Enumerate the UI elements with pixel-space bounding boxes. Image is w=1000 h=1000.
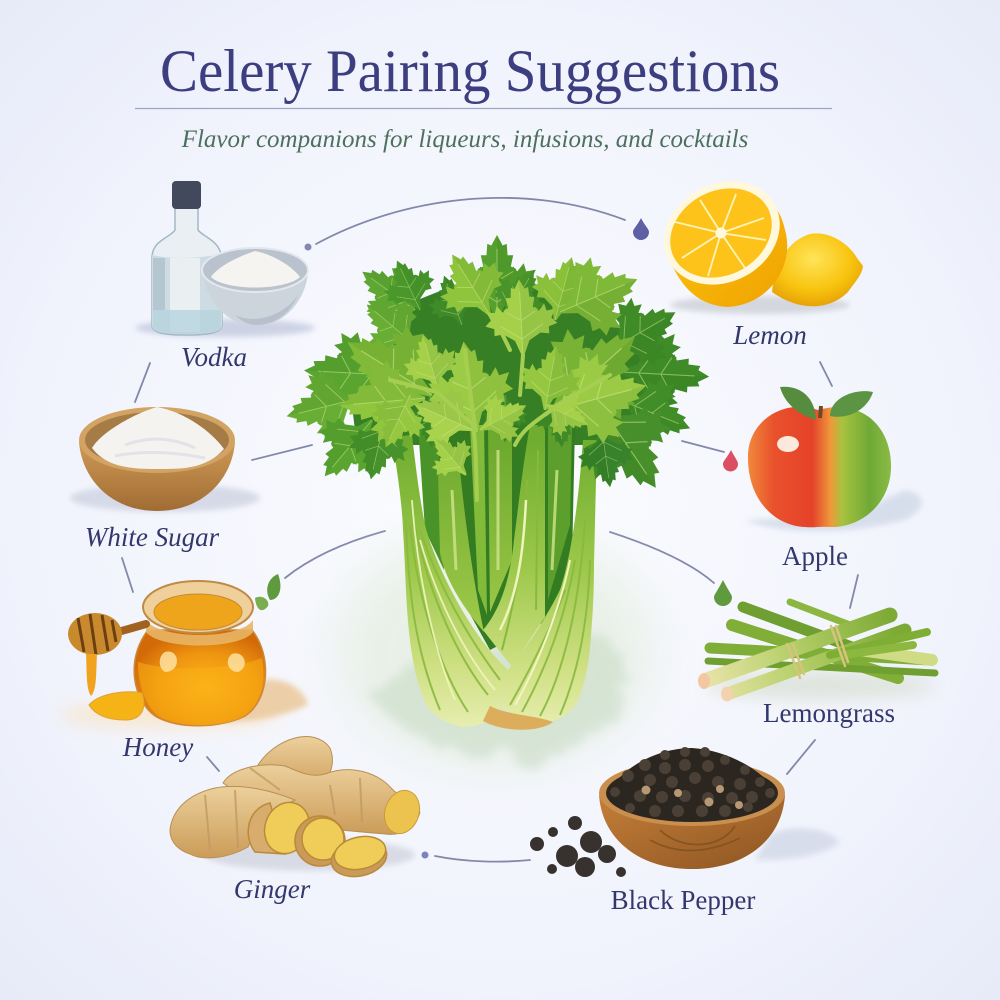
label: black pepper: Black Pepper <box>611 885 755 915</box>
label: apple: Apple <box>782 541 848 571</box>
label: vodka: Vodka <box>181 342 247 372</box>
icon: honey dipper <box>68 613 146 720</box>
connector markers <box>255 218 738 858</box>
subtitle: Flavor companions for liqueurs, infusions, and cocktails <box>181 126 748 153</box>
icon: cut lemon <box>646 162 798 307</box>
celery stalks <box>392 425 597 730</box>
icon: ginger root <box>170 737 425 858</box>
icon: loose peppercorns <box>530 816 626 877</box>
lemon shadow <box>670 296 850 314</box>
item: vodka <box>135 181 315 372</box>
lemongrass shadow <box>705 671 935 699</box>
honey wash <box>60 679 308 727</box>
label: honey: Honey <box>122 732 193 762</box>
item: black pepper <box>530 747 840 915</box>
ginger shadow <box>205 839 415 871</box>
icon: whole lemon <box>772 233 863 306</box>
icon: honey jar <box>134 581 266 726</box>
sugar shadow <box>70 484 260 512</box>
left outer stalk <box>392 435 508 727</box>
item: white sugar <box>70 407 260 552</box>
vodka shadow <box>135 319 315 337</box>
celery wash <box>335 530 655 770</box>
label: ginger: Ginger <box>234 874 311 904</box>
icon: apple <box>748 387 891 527</box>
small inner leaf <box>418 424 483 489</box>
leaves outer <box>278 235 711 514</box>
connectors <box>122 198 858 862</box>
icon: pepper bowl <box>599 747 785 869</box>
celery base <box>483 706 553 730</box>
item: lemon <box>646 162 863 350</box>
item: ginger <box>170 737 425 904</box>
icon: salt bowl <box>202 248 308 326</box>
apple shadow <box>745 490 922 531</box>
label: lemon: Lemon <box>732 320 807 350</box>
pepper shadow <box>755 828 840 860</box>
label: lemongrass: Lemongrass <box>763 698 895 728</box>
icon: vodka bottle <box>152 181 222 335</box>
leaves front <box>322 236 670 459</box>
celery <box>278 235 711 770</box>
middle stalk <box>483 425 545 667</box>
item: honey <box>60 581 308 762</box>
title: Celery Pairing Suggestions <box>160 38 780 104</box>
item: lemongrass <box>698 602 935 728</box>
icon: ginger slices <box>248 796 390 881</box>
right outer stalk <box>500 440 597 724</box>
inner stalks <box>418 425 575 650</box>
icon: sugar bowl <box>79 407 235 511</box>
leaf stems <box>390 315 610 500</box>
leaves shadow mass <box>350 275 650 445</box>
icon: lemongrass bundle <box>698 602 935 702</box>
label: white sugar: White Sugar <box>85 522 220 552</box>
item: apple <box>745 387 922 571</box>
